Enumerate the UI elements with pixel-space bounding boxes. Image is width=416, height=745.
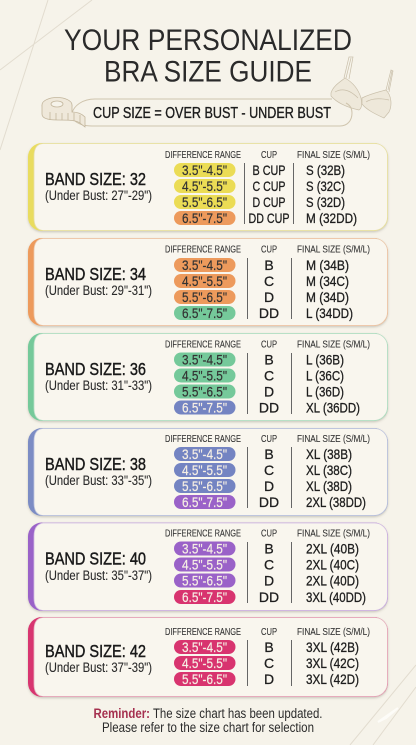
reminder note [94, 706, 322, 735]
panel: band size 32: M (32DD) [306, 210, 357, 226]
panel: band size 42: 3XL (42B) [306, 639, 359, 655]
panel: band size 38: DIFFERENCE RANGE [165, 433, 241, 445]
panel: band size 40: B [264, 540, 274, 556]
panel: band size 38: XL (38D) [306, 478, 352, 494]
panel: band size 34: DD [259, 305, 279, 321]
panel: band size 32: D CUP [252, 194, 286, 210]
panel: band size 32: S (32B) [306, 162, 345, 178]
panel: band size 34: BAND SIZE: 34 [45, 264, 146, 284]
panel: band size 32: S (32C) [306, 178, 345, 194]
panel: band size 32: FINAL SIZE (S/M/L) [297, 149, 370, 161]
panel: band size 38: 6.5"-7.5" [182, 495, 227, 510]
panel: band size 32: CUP [261, 149, 277, 161]
panel: band size 42: D [264, 671, 274, 687]
panel: band size 34: L (34DD) [306, 305, 353, 321]
panel: band size 34: (Under Bust: 29"-31") [45, 283, 152, 298]
panel: band size 38: XL (38C) [306, 462, 352, 478]
panel: band size 34: 3.5"-4.5" [182, 258, 227, 273]
panel: band size 36: L (36B) [306, 352, 344, 368]
panel: band size 32: (Under Bust: 27"-29") [45, 188, 152, 203]
reminder note: Reminder: The size chart has been updated. [94, 706, 322, 721]
panel: band size 34: 6.5"-7.5" [182, 306, 227, 321]
panel: band size 32: DD CUP [248, 210, 290, 226]
panel: band size 42: 3XL (42C) [306, 655, 359, 671]
panel: band size 42: 3XL (42D) [306, 671, 359, 687]
panel: band size 36: L (36D) [306, 384, 344, 400]
panel: band size 42: 3.5"-4.5" [182, 640, 227, 655]
icon: measuring tape [42, 98, 85, 127]
panel: band size 38: BAND SIZE: 38 [45, 454, 146, 474]
panel: band size 42: B [264, 639, 274, 655]
panel: band size 36 [28, 333, 388, 421]
panel: band size 36: XL (36DD) [306, 400, 360, 416]
title [64, 24, 352, 88]
panel: band size 32: 4.5"-5.5" [182, 179, 227, 194]
panel: band size 34: CUP [261, 244, 277, 256]
panel: band size 34: M (34C) [306, 273, 349, 289]
panel: band size 40: 3.5"-4.5" [182, 541, 227, 556]
panel: band size 36: B [264, 352, 274, 368]
panel: band size 38: FINAL SIZE (S/M/L) [297, 433, 370, 445]
panel: band size 40: FINAL SIZE (S/M/L) [297, 528, 370, 540]
panel: band size 36: C [264, 368, 274, 384]
panel: band size 32: DIFFERENCE RANGE [165, 149, 241, 161]
panel: band size 42: C [264, 655, 274, 671]
panel: band size 40: 6.5"-7.5" [182, 590, 227, 605]
panel: band size 40: CUP [261, 528, 277, 540]
panel: band size 34: FINAL SIZE (S/M/L) [297, 244, 370, 256]
panel: band size 36: 3.5"-4.5" [182, 352, 227, 367]
panel: band size 36: 4.5"-5.5" [182, 368, 227, 383]
panel: band size 34: M (34B) [306, 257, 349, 273]
panel: band size 34: M (34D) [306, 289, 349, 305]
panel: band size 36: CUP [261, 338, 277, 350]
panel: band size 38: B [264, 446, 274, 462]
panel: band size 32: BAND SIZE: 32 [45, 169, 146, 189]
panel: band size 40: BAND SIZE: 40 [45, 548, 146, 568]
panel: band size 32: C CUP [252, 178, 286, 194]
panel: band size 40: D [264, 572, 274, 588]
panel: band size 36: L (36C) [306, 368, 344, 384]
panel: band size 34: C [264, 273, 274, 289]
panel: band size 40: (Under Bust: 35"-37") [45, 568, 152, 583]
panel: band size 40: 2XL (40D) [306, 572, 359, 588]
title: BRA SIZE GUIDE [104, 56, 312, 88]
panel: band size 42: DIFFERENCE RANGE [165, 626, 241, 638]
panel: band size 42: BAND SIZE: 42 [45, 641, 146, 661]
panel: band size 32: 6.5"-7.5" [182, 211, 227, 226]
panel: band size 42: 4.5"-5.5" [182, 656, 227, 671]
icon: bra [331, 57, 393, 118]
panel: band size 38: DD [259, 494, 279, 510]
panel: band size 42: CUP [261, 626, 277, 638]
panel: band size 32: B CUP [252, 162, 286, 178]
panel: band size 40: 3XL (40DD) [306, 589, 366, 605]
panel: band size 38: (Under Bust: 33"-35") [45, 473, 152, 488]
panel: band size 38: XL (38B) [306, 446, 352, 462]
panel: band size 40: 4.5"-5.5" [182, 557, 227, 572]
panel: band size 40 [28, 522, 388, 611]
panel: band size 34: B [264, 257, 274, 273]
panel: band size 36: 5.5"-6.5" [182, 384, 227, 399]
panel: band size 40: 5.5"-6.5" [182, 573, 227, 588]
panel: band size 36: FINAL SIZE (S/M/L) [297, 338, 370, 350]
panel: band size 40: DD [259, 589, 279, 605]
panel: band size 34: 5.5"-6.5" [182, 290, 227, 305]
formula pill: CUP SIZE = OVER BUST - UNDER BUST [93, 105, 331, 122]
title: YOUR PERSONALIZED [64, 24, 352, 57]
panel: band size 38: 3.5"-4.5" [182, 447, 227, 462]
panel: band size 38: 2XL (38DD) [306, 494, 366, 510]
panel: band size 36: DD [259, 400, 279, 416]
panel: band size 32: S (32D) [306, 194, 345, 210]
panel: band size 42: (Under Bust: 37"-39") [45, 660, 152, 675]
panel: band size 38: 5.5"-6.5" [182, 479, 227, 494]
panel: band size 40: 2XL (40B) [306, 540, 359, 556]
panel: band size 36: 6.5"-7.5" [182, 400, 227, 415]
panel: band size 34 [28, 238, 388, 326]
panel: band size 42: FINAL SIZE (S/M/L) [297, 626, 370, 638]
panel: band size 36: (Under Bust: 31"-33") [45, 378, 152, 393]
panel: band size 40: C [264, 556, 274, 572]
panel: band size 42: 5.5"-6.5" [182, 672, 227, 687]
panel: band size 34: 4.5"-5.5" [182, 274, 227, 289]
panel: band size 38: D [264, 478, 274, 494]
panel: band size 34: DIFFERENCE RANGE [165, 244, 241, 256]
reminder note: Please refer to the size chart for selection [102, 720, 314, 735]
panel: band size 32: 3.5"-4.5" [182, 163, 227, 178]
panel: band size 36: BAND SIZE: 36 [45, 359, 146, 379]
panel: band size 32: 5.5"-6.5" [182, 195, 227, 210]
formula pill [72, 99, 352, 126]
panel: band size 34: D [264, 289, 274, 305]
panel: band size 40: 2XL (40C) [306, 556, 359, 572]
panel: band size 38: CUP [261, 433, 277, 445]
panel: band size 38: C [264, 462, 274, 478]
panel: band size 40: DIFFERENCE RANGE [165, 528, 241, 540]
panel: band size 38: 4.5"-5.5" [182, 463, 227, 478]
panel: band size 38 [28, 428, 388, 516]
panel: band size 36: DIFFERENCE RANGE [165, 338, 241, 350]
panel: band size 36: D [264, 384, 274, 400]
panel: band size 42 [28, 617, 388, 697]
panel: band size 32 [28, 143, 388, 231]
